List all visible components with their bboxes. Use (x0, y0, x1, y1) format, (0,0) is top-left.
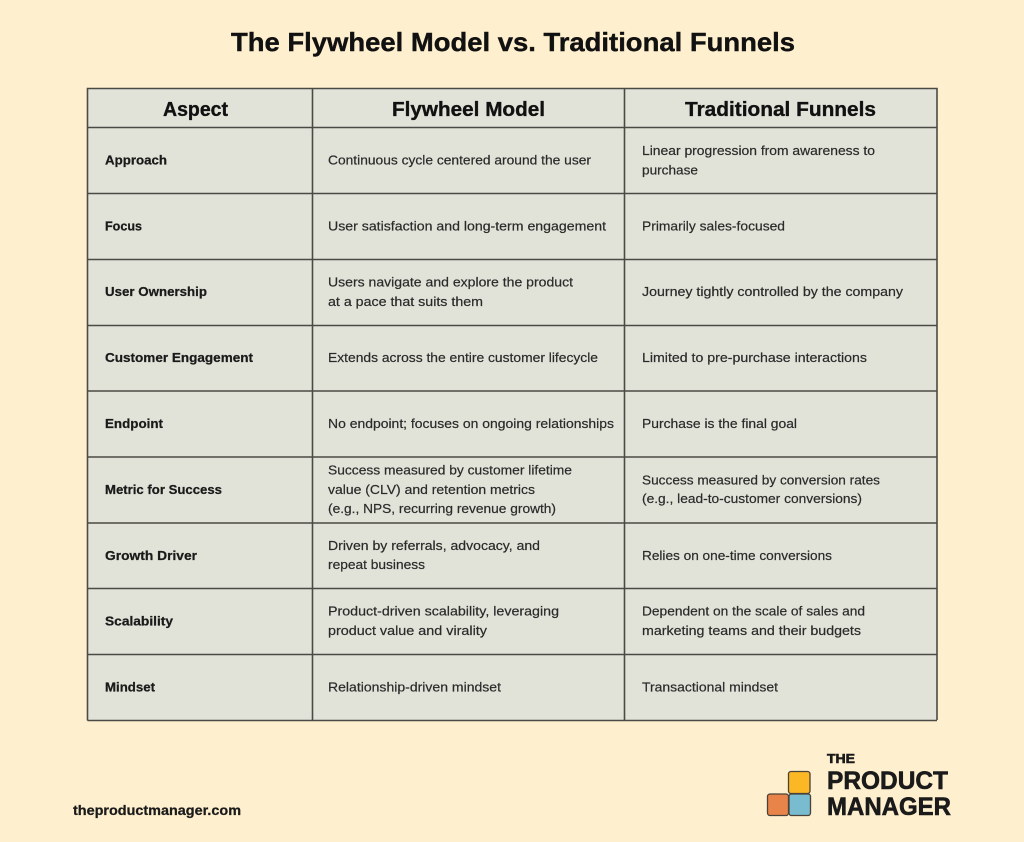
row: Endpoint: Purchase is the final goal (642, 416, 797, 431)
row: Endpoint: Endpoint (105, 416, 164, 431)
row: User Ownership: Journey tightly controlled by the company (642, 284, 904, 299)
row: Metric for Success: (e.g., NPS, recurring revenue growth) (328, 501, 556, 516)
row: Approach: purchase (642, 162, 698, 178)
row: Metric for Success: Success measured by customer lifetime (328, 462, 572, 478)
row: Focus: User satisfaction and long-term engagement (328, 218, 606, 234)
table header row: Flywheel Model (392, 99, 545, 121)
row: Mindset (105, 680, 778, 694)
row: Scalability: marketing teams and their budgets (642, 623, 862, 638)
row: Scalability (105, 604, 865, 638)
row: Metric for Success: Success measured by conversion rates (642, 472, 881, 488)
row: Customer Engagement: Limited to pre-purchase interactions (642, 350, 868, 365)
row: Approach: Approach (105, 152, 167, 168)
row: User Ownership: Users navigate and explore the product (328, 274, 573, 290)
row: Mindset: Mindset (105, 680, 156, 694)
row: Focus (105, 218, 785, 234)
row: Endpoint: No endpoint; focuses on ongoing relationships (328, 416, 615, 431)
row: Scalability: product value and virality (328, 623, 488, 638)
row: Approach: Continuous cycle centered around the user (328, 152, 592, 168)
logo: The Product Manager (768, 751, 951, 821)
table header row (163, 99, 876, 121)
row: Approach: Linear progression from awareness to (642, 143, 875, 158)
row: Focus: Primarily sales-focused (642, 218, 785, 234)
row: Scalability: Scalability (105, 614, 174, 628)
row: Customer Engagement: Extends across the entire customer lifecycle (328, 350, 598, 365)
row: Growth Driver: Growth Driver (105, 548, 197, 563)
row: Growth Driver: Driven by referrals, advocacy, and (328, 538, 540, 553)
row: Focus: Focus (105, 218, 142, 234)
row: Mindset: Transactional mindset (642, 680, 778, 694)
row: Endpoint (105, 416, 797, 431)
row: Growth Driver (105, 538, 833, 572)
comparison table (88, 88, 937, 720)
row: User Ownership: at a pace that suits them (328, 294, 483, 309)
row: Customer Engagement: Customer Engagement (105, 350, 254, 365)
logo wordmark: PRODUCT (827, 767, 948, 795)
row: Metric for Success: value (CLV) and retention metrics (328, 482, 536, 497)
row: Customer Engagement (105, 350, 868, 365)
logo wordmark (827, 751, 951, 821)
row: Metric for Success (105, 462, 881, 516)
row: User Ownership (105, 274, 904, 309)
table header row: Traditional Funnels (685, 99, 876, 121)
icon: three coloured squares (768, 772, 810, 816)
table header row: Aspect (163, 99, 228, 121)
row: Metric for Success: Metric for Success (105, 482, 222, 497)
row: User Ownership: User Ownership (105, 284, 207, 299)
row: Growth Driver: Relies on one-time conversions (642, 548, 833, 563)
logo wordmark: THE (827, 751, 855, 766)
title: The Flywheel Model vs. Traditional Funnels (231, 27, 795, 57)
row: Growth Driver: repeat business (328, 557, 426, 572)
row: Scalability: Product-driven scalability, leveraging (328, 604, 559, 618)
row: Metric for Success: (e.g., lead-to-customer conversions) (642, 491, 862, 506)
row: Scalability: Dependent on the scale of sales and (642, 604, 865, 618)
row: Mindset: Relationship-driven mindset (328, 680, 501, 694)
footer website address: theproductmanager.com (73, 803, 241, 818)
logo wordmark: MANAGER (827, 793, 951, 821)
row: Approach (105, 143, 875, 178)
